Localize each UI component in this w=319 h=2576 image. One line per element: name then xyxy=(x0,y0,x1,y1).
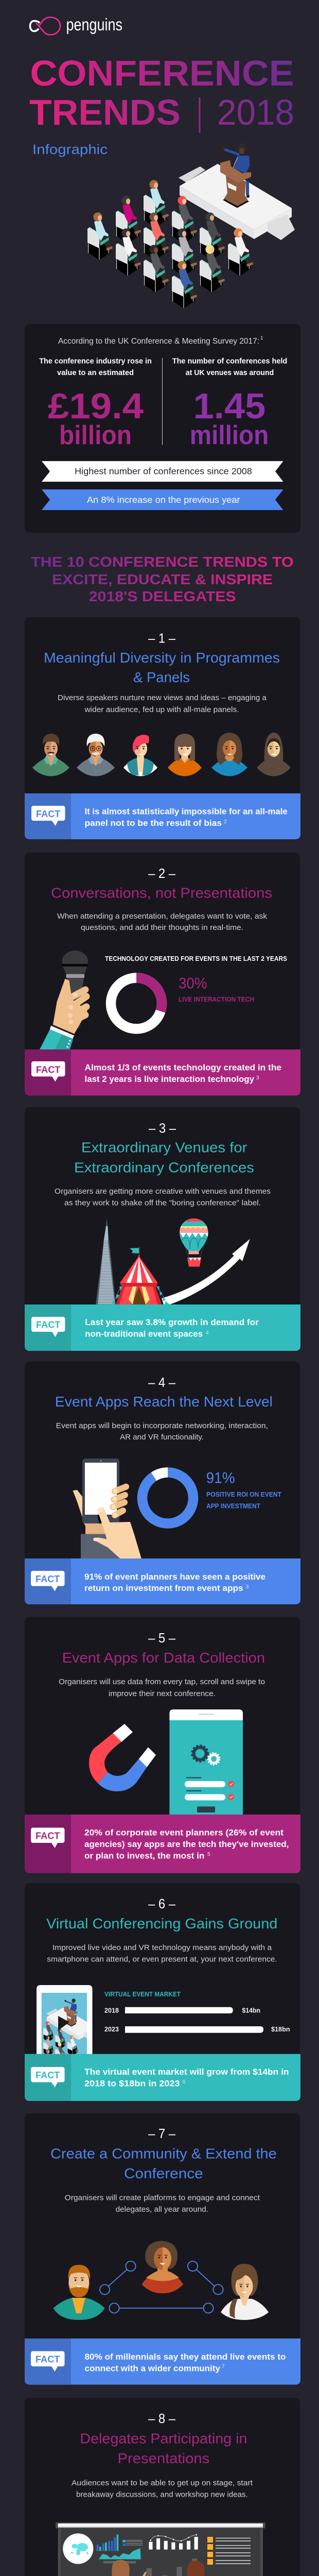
subtitle: Infographic xyxy=(32,142,108,157)
body text: When attending a presentation, delegates want to vote, ask xyxy=(57,912,268,921)
number: – 3 – xyxy=(149,1121,176,1136)
avatars: diverse speakers xyxy=(32,733,291,776)
right stat: million xyxy=(190,420,269,450)
icon: tablet streaming conference xyxy=(37,1985,93,2054)
body text xyxy=(47,1944,277,1964)
bar chart: virtual event market: $14bn xyxy=(242,2006,260,2014)
right stat: The number of conferences held xyxy=(172,357,287,366)
body text xyxy=(65,2194,260,2214)
body text: smartphone can attend, or even present at, your next conference. xyxy=(47,1956,277,1964)
avatar: bearded man left xyxy=(54,2265,105,2320)
body text xyxy=(55,1188,271,1207)
number: – 5 – xyxy=(148,1630,175,1646)
body text xyxy=(58,694,267,714)
ribbon: 8% increase: An 8% increase on the previous year xyxy=(87,495,240,505)
body text: Diverse speakers nurture new views and ideas – engaging a xyxy=(58,694,267,702)
panel: trend 8 xyxy=(25,2398,300,2576)
body text xyxy=(59,1678,265,1698)
fact band xyxy=(25,2338,300,2385)
bar chart: virtual event market xyxy=(104,1991,290,2033)
fact band: 7 xyxy=(222,2364,225,2369)
body text: Improved live video and VR technology means anybody with a xyxy=(52,1944,272,1952)
fact band: FACT xyxy=(36,2070,60,2080)
icon: hand holding phone xyxy=(73,1459,141,1558)
body text: wider audience, fed up with all-male panels. xyxy=(84,706,239,714)
illustration: projection screen with charts xyxy=(56,2522,265,2576)
survey intro: According to the UK Conference & Meeting Survey 2017: xyxy=(58,337,259,346)
number: – 2 – xyxy=(148,866,175,881)
section heading: EXCITE, EDUCATE & INSPIRE xyxy=(52,571,273,587)
bar chart: virtual event market: $18bn xyxy=(271,2025,290,2033)
panel: trend 4 xyxy=(25,1362,300,1604)
body text: questions, and add their thoughts in real-time. xyxy=(81,924,243,932)
body text xyxy=(57,912,268,932)
title: TRENDS xyxy=(29,92,181,132)
heading: & Panels xyxy=(133,669,190,685)
heading: Conversations, not Presentations xyxy=(51,885,272,901)
heading xyxy=(50,2146,277,2181)
title: 2018 xyxy=(217,92,294,132)
left stat: £19.4 xyxy=(48,386,144,426)
body text: as they work to shake off the "boring conference" label. xyxy=(64,1199,261,1207)
left stat: billion xyxy=(59,420,132,450)
panel: trend 2 xyxy=(25,853,300,1095)
left stat xyxy=(39,357,152,450)
background bars xyxy=(63,2558,258,2576)
donut label: APP INVESTMENT xyxy=(206,1502,260,1510)
number: – 8 – xyxy=(148,2411,175,2426)
body text xyxy=(56,1422,268,1442)
fact band: FACT xyxy=(36,1320,60,1330)
donut label: POSITIVE ROI ON EVENT xyxy=(206,1491,281,1498)
globe xyxy=(63,2533,93,2564)
logo: penguins header: penguins xyxy=(66,15,122,34)
bar chart: virtual event market: 2023 xyxy=(104,2025,119,2033)
fact band: 20% of corporate event planners (26% of event xyxy=(84,1828,284,1837)
body text: delegates, all year around. xyxy=(116,2206,208,2214)
heading xyxy=(80,2431,247,2466)
right stat: at UK venues was around xyxy=(186,368,274,377)
fact band: 4 xyxy=(206,1330,209,1336)
logo: penguins header xyxy=(30,15,122,35)
section heading: THE 10 CONFERENCE TRENDS TO xyxy=(31,554,294,570)
donut label: 30% xyxy=(179,975,207,992)
fact band: FACT xyxy=(36,1064,60,1075)
avatar: woman centre xyxy=(142,2241,183,2293)
icon: magnet xyxy=(89,1724,156,1791)
right stat xyxy=(172,357,287,450)
heading: Event Apps for Data Collection xyxy=(62,1650,265,1666)
heading: Meaningful Diversity in Programmes xyxy=(44,650,280,666)
bar chart: virtual event market: VIRTUAL EVENT MARKET xyxy=(104,1991,181,1998)
fact band: 80% of millennials say they attend live events to xyxy=(84,2352,286,2362)
fact band: non-traditional event spaces xyxy=(85,1330,203,1339)
bar chart: virtual event market: 2018 xyxy=(104,2006,119,2014)
body text: Event apps will begin to incorporate networking, interaction, xyxy=(56,1422,268,1430)
fact band xyxy=(25,2054,300,2101)
divider xyxy=(162,358,163,445)
heading: Virtual Conferencing Gains Ground xyxy=(46,1916,277,1931)
fact band: or plan to invest, the most in xyxy=(84,1852,204,1861)
icon: shard skyscraper xyxy=(96,1218,116,1304)
fact band: 3 xyxy=(256,1075,259,1081)
fact band: 5 xyxy=(207,1852,210,1857)
fact band: FACT xyxy=(36,2354,60,2365)
illustration: speaker on stage with seated audience xyxy=(87,143,295,309)
number: – 6 – xyxy=(148,1896,175,1911)
icon: hand holding microphone xyxy=(40,951,88,1049)
fact band: FACT xyxy=(36,1574,60,1584)
donut chart: 91% xyxy=(142,1472,193,1523)
panel: trend 5 xyxy=(25,1617,300,1873)
fact band: 2018 to $18bn in 2023 xyxy=(84,2079,180,2089)
icon: growth arrow xyxy=(162,1239,250,1304)
body text xyxy=(72,2479,253,2499)
fact band: agencies) say apps are the tech they've invested, xyxy=(84,1840,289,1849)
blue bars xyxy=(97,2534,143,2563)
fact band xyxy=(25,1815,300,1873)
panel: survey statistics xyxy=(25,324,300,533)
fact band xyxy=(25,1049,300,1095)
fact band: 91% of event planners have seen a positive xyxy=(84,1572,265,1582)
number: – 1 – xyxy=(148,631,175,646)
fact band xyxy=(25,1304,300,1351)
heading: Extraordinary Venues for xyxy=(81,1139,247,1155)
illustration: woman presenting xyxy=(112,2560,149,2576)
section heading xyxy=(31,554,294,604)
ribbon: 8% increase xyxy=(42,489,283,510)
body text: Organisers are getting more creative with venues and themes xyxy=(55,1188,271,1196)
illustration: man pointing xyxy=(168,2561,209,2576)
fact band: panel not to be the result of bias xyxy=(84,819,222,828)
icon: hot air balloon xyxy=(180,1218,208,1267)
network connection links xyxy=(100,2261,223,2313)
fact band: connect with a wider community xyxy=(84,2364,221,2373)
section heading: 2018'S DELEGATES xyxy=(89,588,236,604)
fact band: FACT xyxy=(36,809,60,819)
fact band: Almost 1/3 of events technology created in the xyxy=(84,1063,281,1073)
fact band: last 2 years is live interaction technology xyxy=(84,1075,255,1084)
heading: Presentations xyxy=(117,2450,209,2466)
panel: trend 1 xyxy=(25,617,300,839)
body text: Organisers will use data from every tap, scroll and swipe to xyxy=(59,1678,265,1686)
donut label xyxy=(179,975,254,1003)
fact band: 2 xyxy=(224,819,227,825)
donut label: LIVE INTERACTION TECH xyxy=(179,996,254,1003)
left stat: The conference industry rose in xyxy=(39,357,152,366)
panel: trend 6 xyxy=(7,1883,300,2101)
fact band: Last year saw 3.8% growth in demand for xyxy=(85,1318,259,1327)
body text: breakaway discussions, and workshop new ideas. xyxy=(76,2490,248,2499)
heading: Event Apps Reach the Next Level xyxy=(55,1394,273,1410)
heading xyxy=(44,650,280,685)
title: CONFERENCE xyxy=(30,53,294,93)
body text: Organisers will create platforms to engage and connect xyxy=(65,2194,260,2202)
number: – 4 – xyxy=(148,1375,175,1390)
heading: Delegates Participating in xyxy=(80,2431,247,2446)
number: – 7 – xyxy=(148,2126,175,2141)
icon: circus tent xyxy=(112,1247,170,1304)
body text: Audiences want to be able to get up on stage, start xyxy=(72,2479,253,2487)
white bars with trend line xyxy=(149,2534,198,2550)
icon: phone with data form xyxy=(169,1709,243,1815)
panel: trend 7 xyxy=(25,2113,300,2385)
body text: AR and VR functionality. xyxy=(120,1433,204,1442)
fact band: It is almost statistically impossible for an all-male xyxy=(84,807,288,817)
orange list xyxy=(207,2537,251,2565)
chart caption: TECHNOLOGY CREATED FOR EVENTS IN THE LAST 2 YEARS xyxy=(105,955,287,962)
fact band xyxy=(25,793,300,839)
avatar: woman right xyxy=(221,2264,269,2320)
fact band: return on investment from event apps xyxy=(84,1584,243,1593)
fact band: FACT xyxy=(36,1831,60,1841)
right stat: 1.45 xyxy=(193,386,265,426)
donut label: 91% xyxy=(206,1470,235,1487)
fact band: 3 xyxy=(246,1584,249,1590)
left stat: value to an estimated xyxy=(57,368,134,377)
fact band: 6 xyxy=(183,2079,186,2085)
panel: trend 3 xyxy=(25,1107,300,1351)
title xyxy=(29,53,294,133)
donut chart: 30% xyxy=(111,978,162,1029)
donut label xyxy=(206,1470,281,1510)
fact band: The virtual event market will grow from $14bn in xyxy=(84,2067,289,2077)
heading: Extraordinary Conferences xyxy=(74,1160,254,1176)
body text: improve their next conference. xyxy=(109,1690,216,1698)
fact band xyxy=(25,1558,300,1604)
heading xyxy=(74,1139,254,1176)
ribbon: highest number: Highest number of conferences since 2008 xyxy=(75,466,252,477)
ribbon: highest number xyxy=(42,461,283,482)
heading: Create a Community & Extend the xyxy=(50,2146,277,2162)
footnote 1: 1 xyxy=(260,335,263,341)
heading: Conference xyxy=(124,2165,203,2181)
